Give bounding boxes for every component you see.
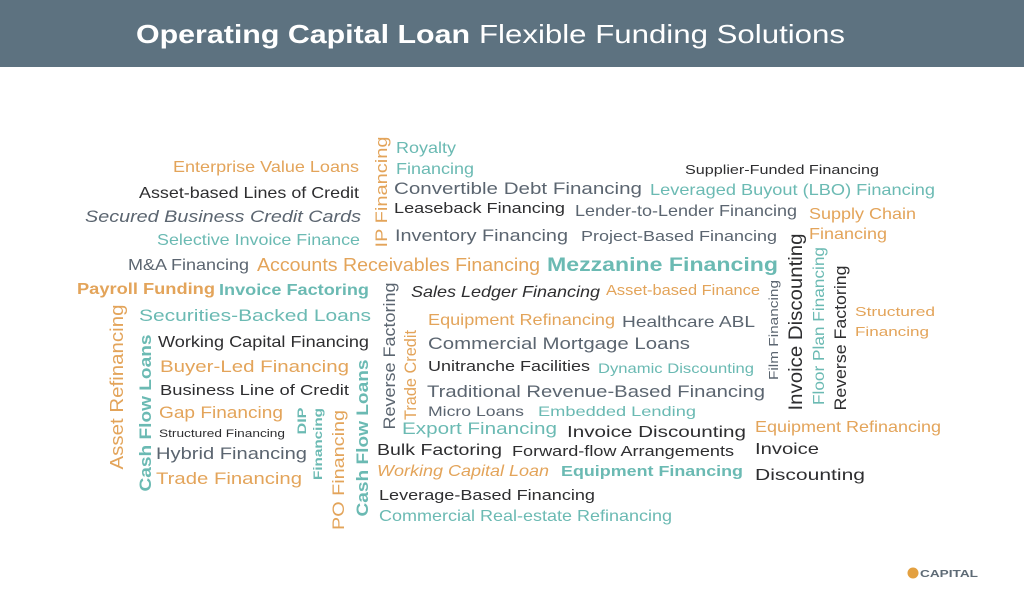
word cloud: Supply Chain — [809, 206, 916, 223]
word cloud: Sales Ledger Financing — [411, 284, 600, 301]
word cloud — [77, 136, 941, 530]
title — [136, 19, 845, 49]
vertical words: PO Financing — [329, 410, 348, 530]
vertical words: Floor Plan Financing — [811, 247, 828, 405]
left column: Secured Business Credit Cards — [85, 207, 362, 226]
word cloud: Healthcare ABL — [622, 314, 755, 331]
left column: Asset-based Lines of Credit — [139, 185, 360, 202]
word cloud: Traditional Revenue-Based Financing — [427, 382, 765, 401]
right: Structured — [855, 304, 935, 319]
vertical words: Cash Flow Loans — [353, 360, 372, 516]
word cloud: Micro Loans — [428, 403, 524, 419]
word cloud: Lender-to-Lender Financing — [575, 203, 797, 220]
word cloud: Gap Financing — [159, 403, 283, 422]
word cloud: Equipment Refinancing — [428, 312, 615, 329]
word cloud: Financing — [855, 324, 929, 339]
word cloud: Leaseback Financing — [394, 200, 565, 217]
word cloud: Structured Financing — [159, 428, 285, 440]
word cloud: Mezzanine Financing — [547, 255, 778, 276]
vertical words: Trade Credit — [401, 330, 420, 420]
word cloud: Hybrid Financing — [156, 444, 307, 463]
word cloud: Accounts Receivables Financing — [257, 255, 540, 275]
word cloud: Working Capital Financing — [158, 334, 369, 351]
word cloud: Equipment Refinancing — [755, 419, 941, 436]
vertical words: Reverse Factoring — [380, 282, 399, 430]
word cloud: Financing — [809, 226, 887, 243]
vertical words: Financing — [311, 408, 325, 480]
title: Flexible Funding Solutions — [479, 19, 845, 49]
vertical words: Cash Flow Loans — [136, 334, 155, 492]
word cloud: Embedded Lending — [538, 403, 696, 419]
left column: Enterprise Value Loans — [173, 159, 359, 176]
vertical words — [107, 136, 850, 530]
word cloud: Convertible Debt Financing — [394, 179, 642, 198]
word cloud: Invoice Factoring — [219, 282, 369, 299]
word cloud: Leverage-Based Financing — [379, 487, 595, 504]
vertical words: Film Financing — [766, 280, 781, 380]
word cloud: Project-Based Financing — [581, 228, 777, 245]
word cloud: Inventory Financing — [395, 226, 568, 245]
vertical words: Asset Refinancing — [107, 304, 127, 470]
word cloud: Bulk Factoring — [377, 442, 502, 459]
word cloud: Supplier-Funded Financing — [685, 162, 879, 177]
word cloud: Securities-Backed Loans — [139, 306, 371, 325]
vertical words: Invoice Discounting — [786, 234, 807, 410]
word cloud: Commercial Mortgage Loans — [428, 334, 690, 353]
word cloud: Leveraged Buyout (LBO) Financing — [650, 182, 935, 199]
word cloud: Discounting — [755, 467, 865, 484]
left column: Selective Invoice Finance — [157, 232, 360, 249]
middle: Royalty — [396, 140, 456, 157]
word cloud: Asset-based Finance — [606, 282, 760, 299]
word cloud: Working Capital Loan — [377, 463, 549, 480]
word cloud: Dynamic Discounting — [598, 360, 754, 376]
word cloud: Forward-flow Arrangements — [512, 443, 734, 460]
word cloud: Financing — [396, 161, 474, 178]
word cloud: Equipment Financing — [561, 463, 743, 480]
word cloud: Buyer-Led Financing — [160, 357, 349, 376]
word cloud: Commercial Real-estate Refinancing — [379, 508, 672, 525]
logo: CAPITAL — [920, 569, 978, 580]
title: Operating Capital Loan — [136, 19, 470, 49]
word cloud: Trade Financing — [156, 469, 302, 488]
word cloud: Payroll Funding — [77, 281, 215, 298]
word cloud: M&A Financing — [128, 257, 249, 274]
word cloud: Unitranche Facilities — [428, 358, 590, 375]
word cloud: Export Financing — [402, 419, 557, 438]
vertical words: DIP — [295, 408, 309, 434]
logo — [908, 568, 978, 580]
header bar — [0, 0, 1024, 67]
vertical words: IP Financing — [372, 136, 391, 248]
vertical words: Reverse Factoring — [831, 266, 850, 410]
word cloud: Business Line of Credit — [160, 382, 350, 399]
word cloud: Invoice — [755, 441, 819, 458]
word cloud: Invoice Discounting — [567, 424, 746, 441]
left column — [85, 159, 362, 249]
